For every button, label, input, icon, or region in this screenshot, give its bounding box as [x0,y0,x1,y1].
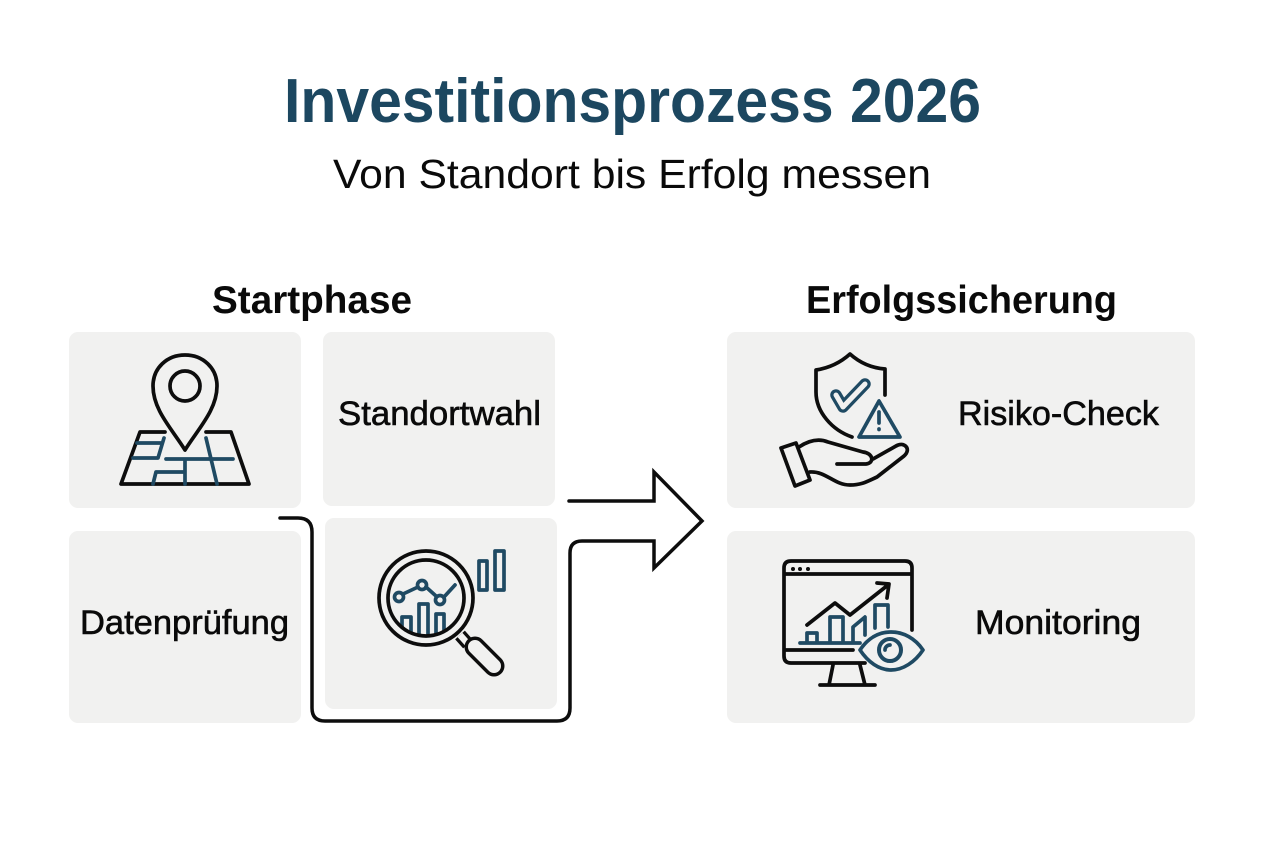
label: Monitoring: Monitoring [975,604,1141,642]
heading: Erfolgssicherung: Erfolgssicherung [806,279,1117,322]
title: Investitionsprozess 2026 [284,67,981,136]
icon: magnifier with charts [379,551,504,666]
panel: map icon card [69,332,301,508]
subtitle: Von Standort bis Erfolg messen [333,151,931,197]
panel: Standortwahl [323,332,555,506]
panel: magnifier icon card [325,518,557,709]
panel: Datenprüfung [69,531,301,723]
label: Risiko-Check: Risiko-Check [958,395,1160,433]
panel: Monitoring [727,531,1195,723]
arrow: connector from Startphase to Erfolgssicherung [280,472,702,721]
heading: Startphase: Startphase [212,279,412,322]
label: Datenprüfung: Datenprüfung [80,604,289,642]
label: Standortwahl: Standortwahl [338,395,541,433]
icon: monitor with chart and eye [784,561,923,685]
panel: Risiko-Check [727,332,1195,508]
icon: map with location pin [121,355,249,484]
icon: shield, warning and hand [781,354,907,486]
